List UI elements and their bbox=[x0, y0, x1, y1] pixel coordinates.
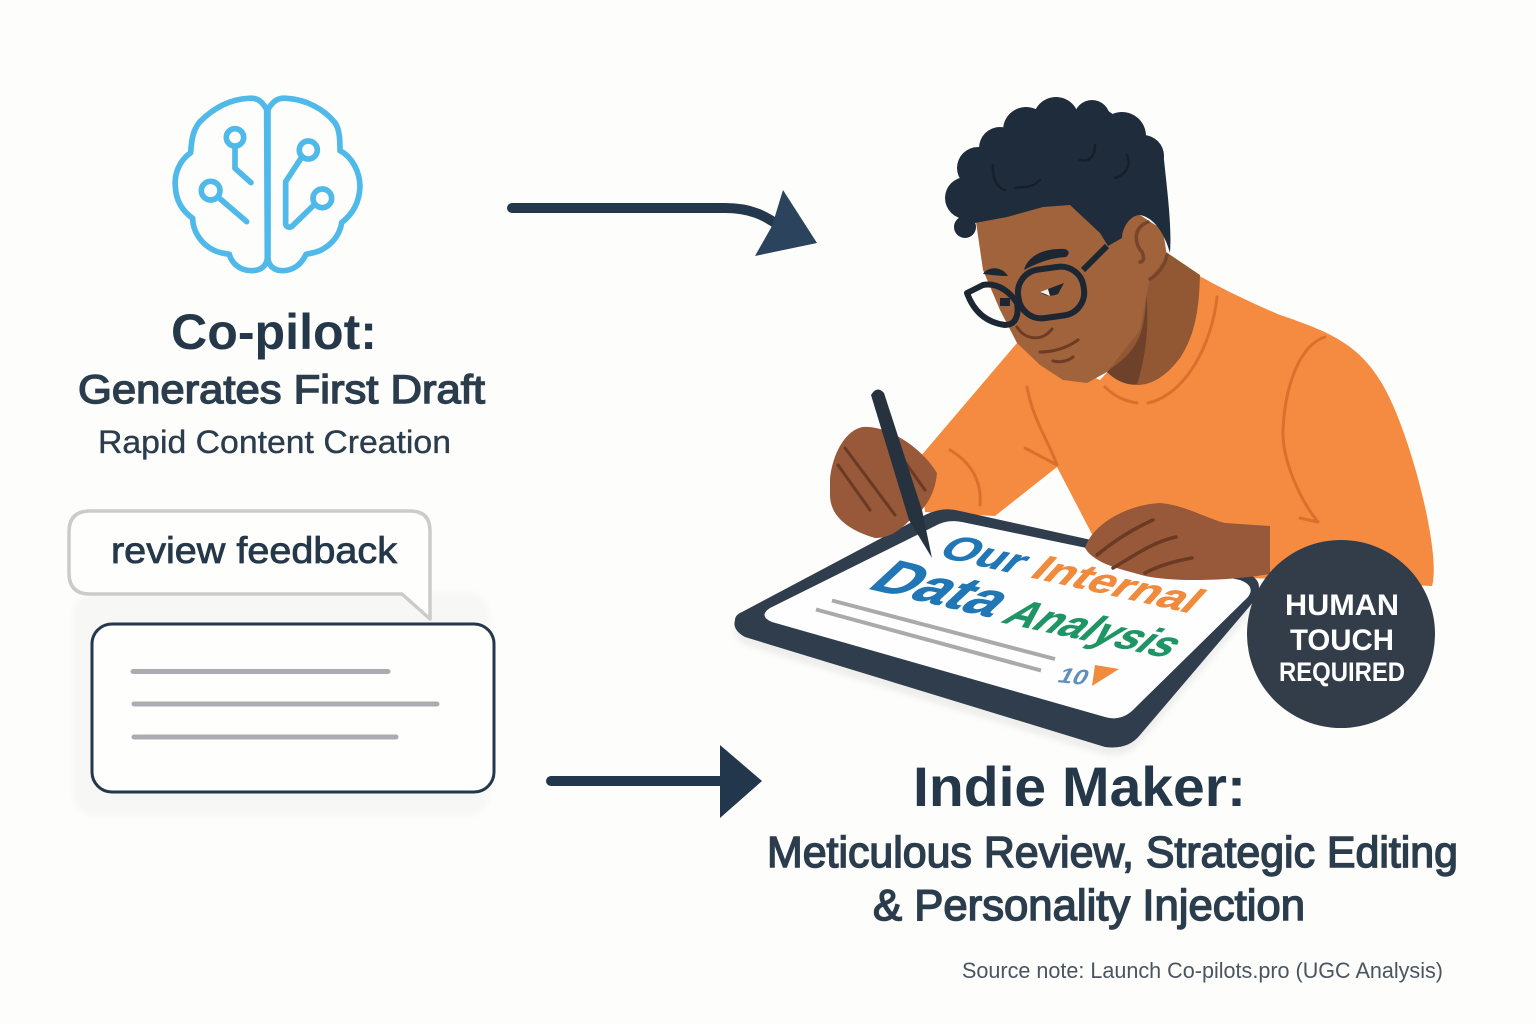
eyes bbox=[1000, 283, 1064, 306]
tablet badge detail: 10 bbox=[1053, 664, 1094, 690]
heading: indie maker: Indie Maker: bbox=[913, 755, 1246, 818]
neck bbox=[1107, 250, 1200, 385]
document shadow backdrop bbox=[72, 592, 490, 816]
subheading: review, editing and personality: & Personality Injection bbox=[873, 881, 1305, 930]
tablet screen title: Our Internal bbox=[930, 529, 1215, 620]
badge: human touch required: HUMAN bbox=[1285, 589, 1399, 622]
badge: human touch required bbox=[1247, 540, 1435, 728]
speech bubble: review feedback: review feedback bbox=[111, 530, 398, 571]
subheading: review, editing and personality: Meticulous Review, Strategic Editing bbox=[767, 828, 1458, 877]
tablet text lines bbox=[816, 600, 1055, 670]
text: rapid content creation: Rapid Content Creation bbox=[98, 424, 451, 460]
hair bbox=[945, 97, 1170, 253]
source note: Source note: Launch Co-pilots.pro (UGC Analysis) bbox=[962, 958, 1443, 983]
face and ear bbox=[975, 190, 1167, 383]
arrow: co-pilot to indie maker bbox=[512, 190, 817, 256]
glasses bbox=[967, 246, 1107, 325]
right hand bbox=[1085, 503, 1270, 580]
icon: AI brain bbox=[175, 98, 360, 271]
draft document card bbox=[92, 624, 494, 792]
arrow: draft to indie maker bbox=[551, 745, 762, 818]
tablet screen title: Analysis bbox=[992, 593, 1196, 665]
speech bubble: review feedback bbox=[69, 511, 430, 619]
subheading: generates first draft: Generates First Draft bbox=[78, 368, 485, 412]
tablet screen title: Data bbox=[856, 551, 1030, 626]
badge: human touch required: REQUIRED bbox=[1279, 657, 1405, 687]
illustration: indie maker person bbox=[920, 97, 1434, 586]
nose and mouth bbox=[1017, 327, 1078, 362]
heading: co-pilot: Co-pilot: bbox=[171, 304, 377, 360]
left hand with stylus bbox=[830, 389, 937, 558]
orange sweater bbox=[920, 275, 1434, 586]
tablet screen title bbox=[856, 529, 1215, 665]
tablet badge detail bbox=[1053, 664, 1119, 690]
subheading: review, editing and personality bbox=[767, 828, 1458, 930]
illustration: tablet bbox=[734, 509, 1259, 756]
stylus bbox=[871, 389, 932, 558]
badge: human touch required: TOUCH bbox=[1290, 624, 1394, 657]
neck shadow bbox=[1107, 293, 1147, 384]
eyebrows bbox=[983, 249, 1069, 276]
